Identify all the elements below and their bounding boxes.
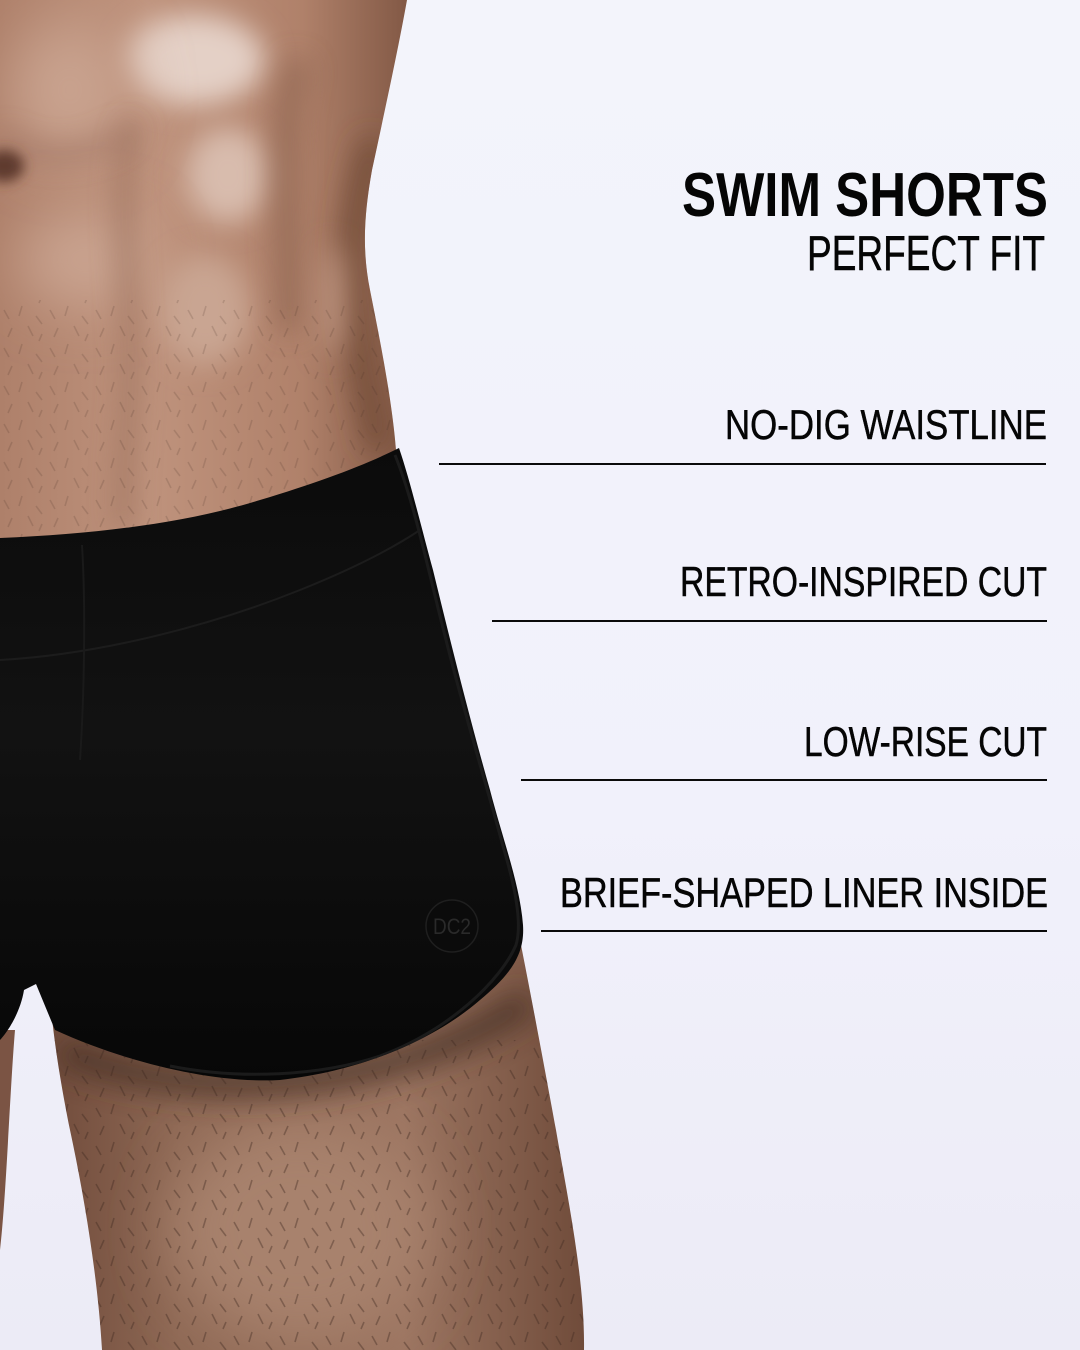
icon: logo badge — [426, 900, 478, 952]
fly seam — [80, 545, 84, 760]
torso — [0, 0, 420, 560]
icon: navel — [0, 150, 24, 182]
icon: logo badge: DC2 — [433, 914, 471, 939]
waistband seam — [0, 530, 420, 660]
model photo — [0, 0, 600, 1350]
fabric details — [0, 455, 518, 1074]
near leg — [40, 930, 600, 1350]
side binding — [170, 455, 518, 1074]
black swim shorts — [0, 448, 523, 1080]
far leg — [0, 1030, 15, 1250]
